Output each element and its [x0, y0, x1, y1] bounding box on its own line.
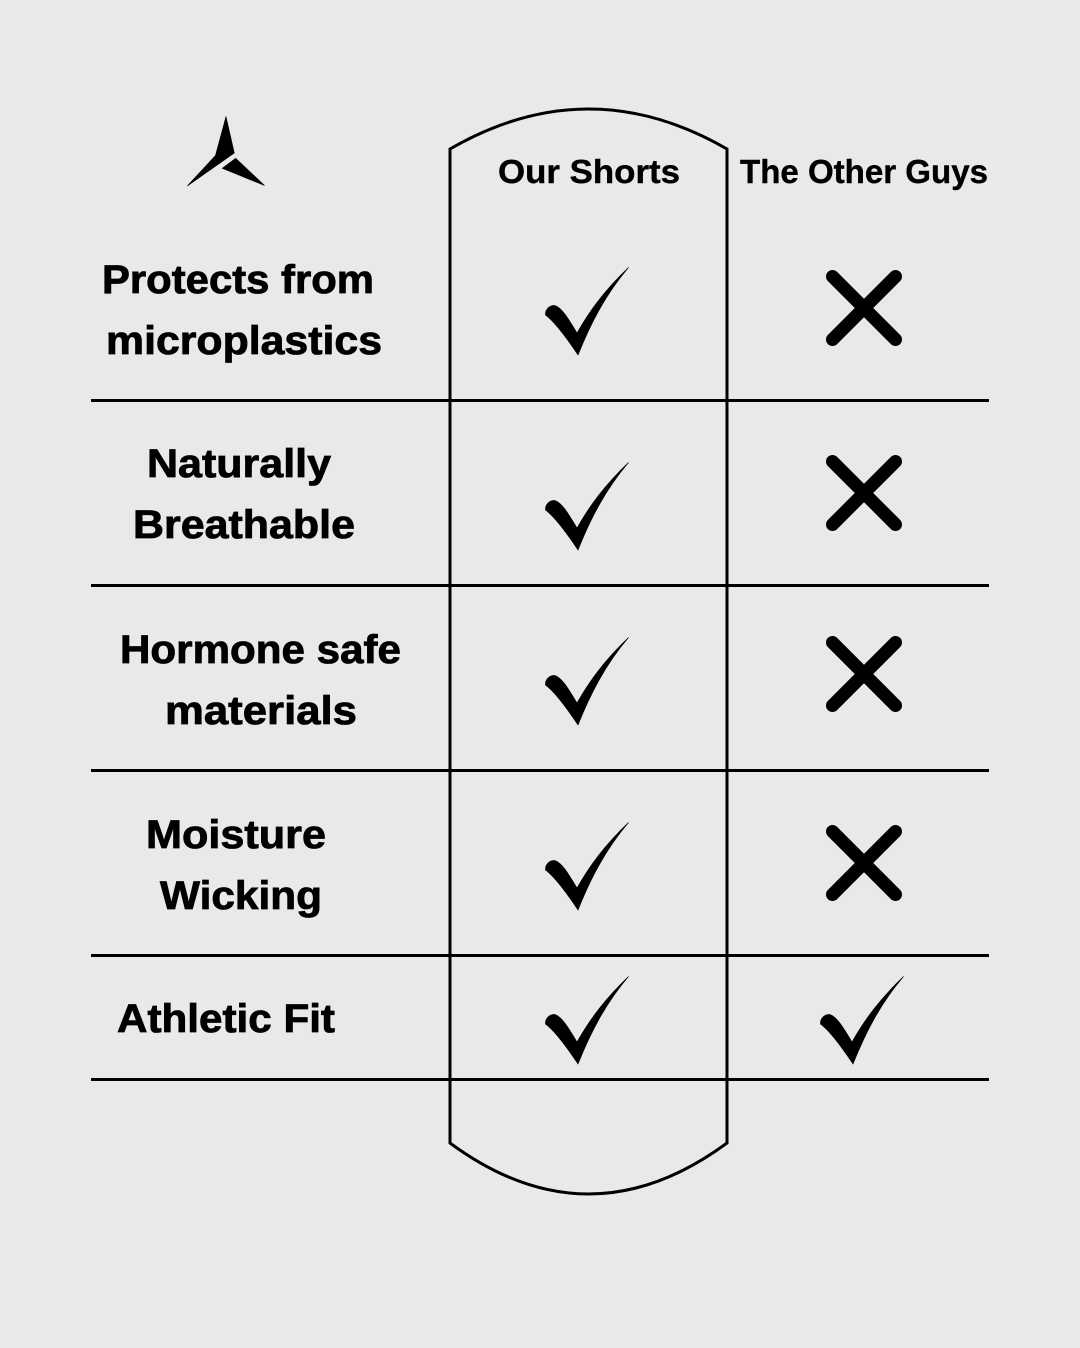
icon: check row 3 our shorts: [545, 638, 628, 725]
panel: our shorts column outline: [450, 109, 727, 1194]
row label: naturally breathable: Naturally: [147, 442, 332, 486]
icon: cross row 4 other guys: [832, 832, 896, 894]
icon: check row 5 our shorts: [545, 976, 628, 1064]
heading: the other guys: The Other Guys: [740, 153, 988, 190]
icon: cross row 1 other guys: [832, 276, 896, 340]
icon: check row 5 other guys: [820, 976, 904, 1064]
heading: our shorts: Our Shorts: [498, 153, 680, 190]
icon: cross row 3 other guys: [832, 642, 896, 706]
row label: protects from microplastics: microplastics: [106, 319, 382, 363]
row label: protects from microplastics: Protects from: [102, 258, 374, 302]
row label: protects from microplastics: [102, 258, 382, 363]
row label: moisture wicking: Moisture: [146, 813, 326, 857]
row label: hormone safe materials: Hormone safe: [120, 628, 401, 672]
row label: naturally breathable: [133, 442, 355, 547]
row label: moisture wicking: [146, 813, 326, 918]
row label: hormone safe materials: materials: [165, 689, 357, 733]
icon: check row 2 our shorts: [545, 462, 628, 550]
row label: athletic fit: Athletic Fit: [117, 997, 335, 1041]
row label: hormone safe materials: [120, 628, 401, 733]
icon: check row 1 our shorts: [545, 268, 628, 355]
icon: check row 4 our shorts: [545, 822, 628, 910]
icon: cross row 2 other guys: [832, 462, 896, 524]
row label: moisture wicking: Wicking: [160, 874, 322, 918]
row label: naturally breathable: Breathable: [133, 503, 355, 547]
icon: brand logo: [187, 116, 264, 186]
